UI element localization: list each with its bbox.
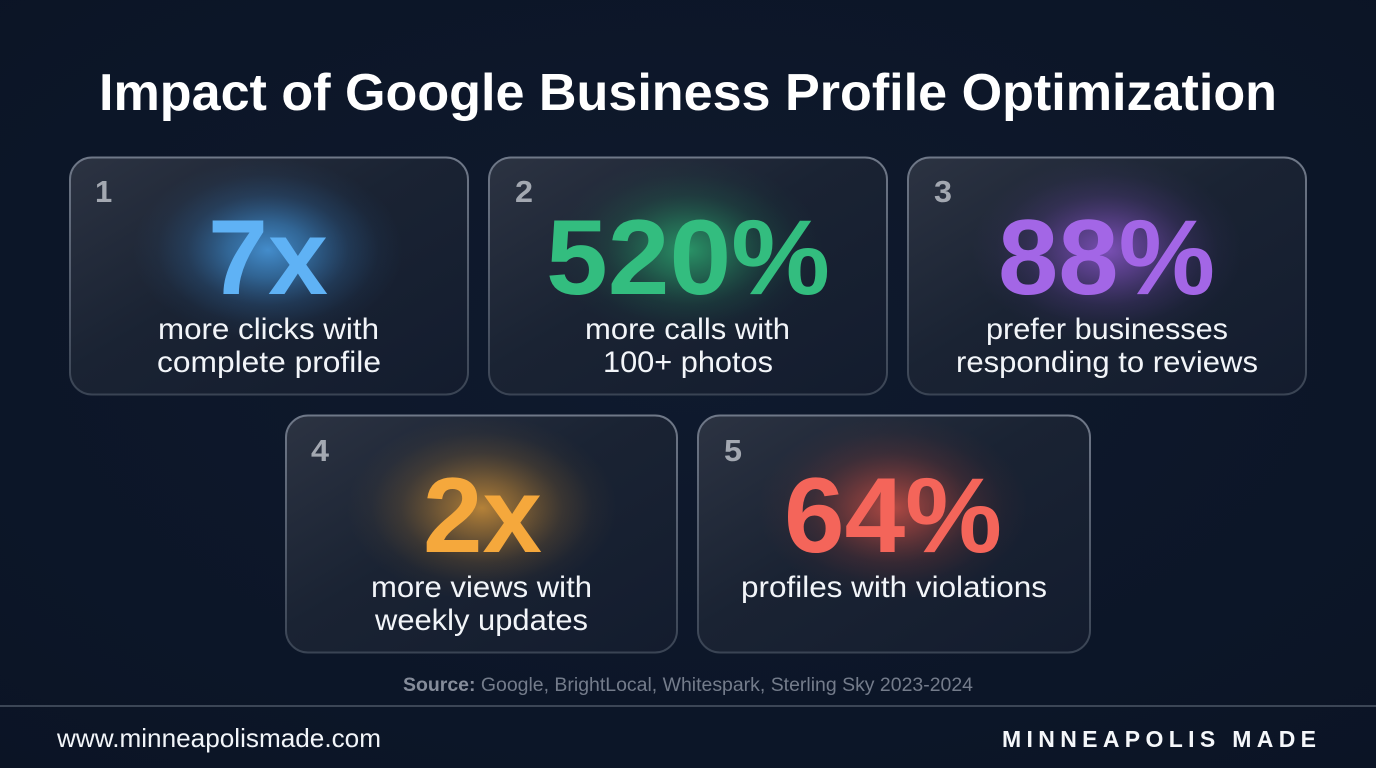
panel: 7x more clicks bbox=[70, 158, 468, 394]
description: profiles with violations bbox=[741, 571, 1047, 604]
source note: Source: Google, BrightLocal, Whitespark, Sterling Sky 2023-2024 bbox=[403, 675, 973, 696]
stat 88%: 88% bbox=[998, 197, 1215, 317]
description: prefer businesses bbox=[986, 313, 1228, 346]
description: weekly updates bbox=[374, 604, 588, 637]
panel: 520% more calls bbox=[489, 158, 887, 394]
card number 4: 4 bbox=[311, 433, 330, 468]
description bbox=[371, 571, 592, 637]
footer brand: MINNEAPOLIS MADE bbox=[1002, 726, 1316, 752]
footer website: www.minneapolismade.com bbox=[56, 723, 381, 753]
stat 2x: 2x bbox=[423, 455, 542, 575]
card number 1: 1 bbox=[95, 174, 112, 209]
description bbox=[157, 313, 381, 379]
glow: amber bbox=[347, 416, 617, 600]
title: Impact of Google Business Profile Optimization bbox=[99, 64, 1277, 122]
card number 5: 5 bbox=[724, 433, 742, 468]
description: complete profile bbox=[157, 346, 381, 379]
panel: 88% prefer businesses bbox=[908, 158, 1306, 394]
description bbox=[585, 313, 790, 379]
card number 2: 2 bbox=[515, 174, 533, 209]
description: responding to reviews bbox=[956, 346, 1258, 379]
glow: purple bbox=[972, 158, 1242, 342]
panel: 64% profiles with violations bbox=[698, 416, 1090, 652]
stat 7x: 7x bbox=[208, 197, 328, 317]
description: more views with bbox=[371, 571, 592, 604]
description: 100+ photos bbox=[603, 346, 773, 379]
description bbox=[956, 313, 1258, 379]
card number 3: 3 bbox=[934, 174, 952, 209]
panel: 2x more views bbox=[286, 416, 677, 652]
glow: green bbox=[553, 158, 823, 342]
glow: blue bbox=[133, 158, 403, 342]
glow: red bbox=[758, 416, 1028, 600]
description: more clicks with bbox=[158, 313, 379, 346]
description: more calls with bbox=[585, 313, 790, 346]
stat 64%: 64% bbox=[784, 455, 1002, 575]
stat 520%: 520% bbox=[546, 197, 830, 317]
